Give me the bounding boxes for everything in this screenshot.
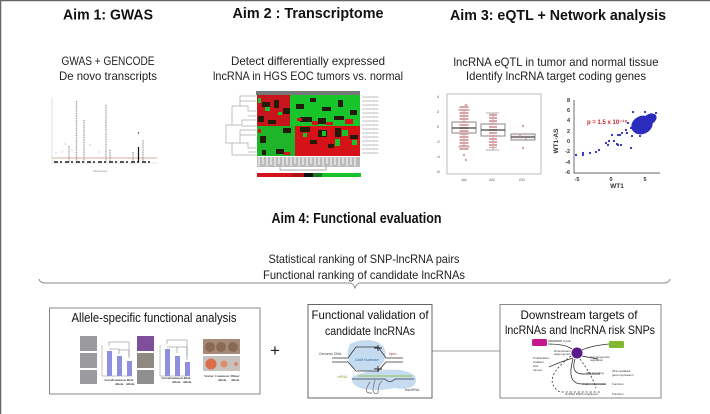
heatmap row labels: LINC00-RNA xyxy=(362,147,378,151)
pathway diagram: p53 signaling xyxy=(586,371,604,375)
pathway diagram: target genes xyxy=(554,352,571,356)
chart: WT1 scatter plot: 5 xyxy=(643,177,647,183)
heatmap row labels: LINC00-RNA xyxy=(362,123,378,127)
title: Aim 3: Aim 3: eQTL + Network analysis xyxy=(450,7,666,24)
bar chart A xyxy=(102,342,135,386)
brace xyxy=(39,279,670,288)
tumour photos: Allele xyxy=(218,378,227,382)
chart: eQTL boxplot: -4 xyxy=(436,154,441,159)
pathway diagram: Function xyxy=(612,392,624,396)
bar chart B xyxy=(160,340,192,384)
heatmap row labels: LINC00-RNA xyxy=(362,127,378,131)
bar chart B: Allele xyxy=(172,380,181,384)
chart: eQTL boxplot: 0 xyxy=(437,124,440,129)
pathway diagram: initiation, xyxy=(533,360,545,364)
tumour photos xyxy=(203,339,240,382)
chart: eQTL boxplot: AG xyxy=(489,177,495,182)
panel heading: candidate lncRNAs xyxy=(325,324,415,338)
chart: WT1 scatter plot: 0 xyxy=(567,139,570,145)
text: Aim 2 description: Detect differentially expressed xyxy=(231,54,385,68)
heatmap row labels xyxy=(362,95,378,155)
panel heading xyxy=(312,308,429,338)
chart: eQTL boxplot: GG xyxy=(519,177,525,182)
tumour photos: Common xyxy=(215,374,229,378)
heading: Aim 4: Aim 4: Functional evaluation xyxy=(272,211,442,227)
chart: eQTL boxplot: 4 xyxy=(437,94,440,99)
heatmap row labels: LINC00-RNA xyxy=(362,151,378,155)
connector line xyxy=(432,350,500,352)
text: Aim 2 description xyxy=(213,54,403,83)
pathway diagram: Tumorigenesis xyxy=(590,355,610,359)
text: Aim 3 description: Identify lncRNA target coding genes xyxy=(466,69,646,83)
text: ranking description: Statistical ranking of SNP-lncRNA pairs xyxy=(268,252,460,266)
heatmap row labels: LINC00-RNA xyxy=(362,107,378,111)
heatmap row labels: LINC00-RNA xyxy=(362,135,378,139)
CRISPR diagram: Genomic DNA xyxy=(319,352,342,356)
pathway diagram: Downstream xyxy=(554,349,571,353)
bar chart A: Common xyxy=(112,378,126,382)
bar chart A: Risk xyxy=(127,378,133,382)
chart: heatmap xyxy=(226,91,378,177)
tumour photos: Vector xyxy=(204,374,214,378)
chart: WT1 scatter plot: 8 xyxy=(567,98,570,104)
CRISPR diagram: crRNA xyxy=(337,375,348,379)
chart: eQTL boxplot: 2 xyxy=(437,109,440,114)
bar chart B: Allele xyxy=(183,380,192,384)
heatmap row labels: LINC00-RNA xyxy=(362,131,378,135)
heatmap row labels: LINC00-RNA xyxy=(362,103,378,107)
heatmap cells xyxy=(257,95,360,156)
pathway diagram: p53-mediated xyxy=(612,369,631,373)
CRISPR diagram: Cas9 Nuclease xyxy=(355,358,379,362)
box AA xyxy=(452,104,476,161)
heatmap row labels: LINC00-RNA xyxy=(362,143,378,147)
pathway diagram: and xyxy=(533,364,538,368)
panel heading: Functional validation of xyxy=(312,308,429,322)
CRISPR diagram: Npm xyxy=(389,352,396,356)
heatmap dendrogram xyxy=(226,96,256,155)
chart: WT1 scatter plot: 6 xyxy=(567,108,570,114)
text: Aim 3 description xyxy=(454,55,659,83)
chart: WT1 scatter plot: -6 xyxy=(565,170,570,176)
chart: eQTL boxplot: AA xyxy=(461,177,467,182)
panel: allele-specific functional analysis xyxy=(50,308,260,394)
panel heading xyxy=(505,308,655,337)
text: Aim 1 description xyxy=(59,54,157,83)
panel: functional validation xyxy=(308,304,432,398)
panel heading: lncRNAs and lncRNA risk SNPs xyxy=(505,323,655,337)
chart: WT1 scatter plot: -4 xyxy=(565,160,571,166)
text: Aim 1 description: GWAS + GENCODE xyxy=(62,54,154,68)
chart: Manhattan plot xyxy=(52,97,157,173)
heatmap row labels: LINC00-RNA xyxy=(362,99,378,103)
CRISPR diagram xyxy=(319,340,420,393)
chart: eQTL boxplot xyxy=(436,94,541,182)
heatmap row labels: LINC00-RNA xyxy=(362,119,378,123)
chart: eQTL boxplot: -6 xyxy=(436,169,441,174)
chart: WT1 scatter plot: WT1-AS xyxy=(553,128,560,153)
bar chart A: Vector xyxy=(104,378,114,382)
panel heading: Allele-specific functional analysis xyxy=(72,311,236,325)
bar chart A: Allele xyxy=(126,382,135,386)
pathway diagram xyxy=(532,339,634,396)
heatmap row labels: LINC00-RNA xyxy=(362,115,378,119)
panel: downstream targets xyxy=(500,304,661,398)
heatmap row labels: LINC00-RNA xyxy=(362,95,378,99)
text: Aim 3 description: lncRNA eQTL in tumor and normal tissue xyxy=(454,55,659,69)
chart: WT1 scatter plot: WT1 xyxy=(610,183,624,190)
scatter p-value: p = 1.5 x 10⁻¹⁸ xyxy=(587,119,627,126)
tumour photos: Allele xyxy=(231,378,240,382)
chart: WT1 scatter plot: 4 xyxy=(567,118,571,124)
bar chart B: Risk xyxy=(184,376,190,380)
chart: WT1 scatter plot: 0 xyxy=(609,177,613,183)
chart: WT1 scatter plot: -2 xyxy=(565,149,570,155)
title: Aim 1: Aim 1: GWAS xyxy=(63,6,153,24)
chart: WT1 scatter plot: -5 xyxy=(575,177,579,183)
scatter points xyxy=(575,111,659,156)
text: ranking description xyxy=(263,252,465,282)
plus sign: + xyxy=(270,341,280,360)
heatmap column labels xyxy=(256,91,360,95)
heatmap colour scale xyxy=(257,173,361,177)
text: Aim 2 description: lncRNA in HGS EOC tumors vs. normal xyxy=(213,69,403,83)
chart: WT1 scatter plot: 2 xyxy=(567,129,570,135)
pathway diagram: Novel xyxy=(590,392,598,396)
bar chart B: Common xyxy=(169,376,183,380)
panel heading: Downstream targets of xyxy=(520,308,638,322)
pathway diagram: Hidden repression xyxy=(582,382,607,386)
text: ranking description: Functional ranking of candidate lncRNAs xyxy=(263,268,465,282)
micrographs B xyxy=(137,336,154,384)
title: Aim 2: Aim 2 : Transcriptome xyxy=(232,5,384,22)
pathway diagram: Function xyxy=(612,382,624,386)
text: Aim 1 description: De novo transcripts xyxy=(59,69,157,83)
box AG xyxy=(481,113,505,150)
pathway diagram: gene repression xyxy=(612,373,634,377)
CRISPR diagram: tracrRNA xyxy=(405,388,420,392)
heatmap row labels: LINC00-RNA xyxy=(362,111,378,115)
bar chart A: Allele xyxy=(115,382,124,386)
heatmap row labels: LINC00-RNA xyxy=(362,139,378,143)
chart: eQTL boxplot: -2 xyxy=(436,139,441,144)
micrographs A xyxy=(80,336,97,384)
pathway diagram: Cyclin xyxy=(563,339,571,343)
tumour photos: Minor xyxy=(230,374,240,378)
chart: Manhattan plot: chromosome xyxy=(93,170,108,173)
heatmap sample labels xyxy=(257,157,360,170)
pathway diagram: tumour xyxy=(533,368,542,372)
pathway diagram: Proliferation, xyxy=(533,356,550,360)
box GG xyxy=(511,125,535,149)
bar chart B: Vector xyxy=(161,376,171,380)
pathway diagram: regulation xyxy=(590,358,604,362)
pathway diagram: lncRNA RNPs loop xyxy=(565,392,591,396)
chart: WT1 scatter plot xyxy=(553,98,660,190)
